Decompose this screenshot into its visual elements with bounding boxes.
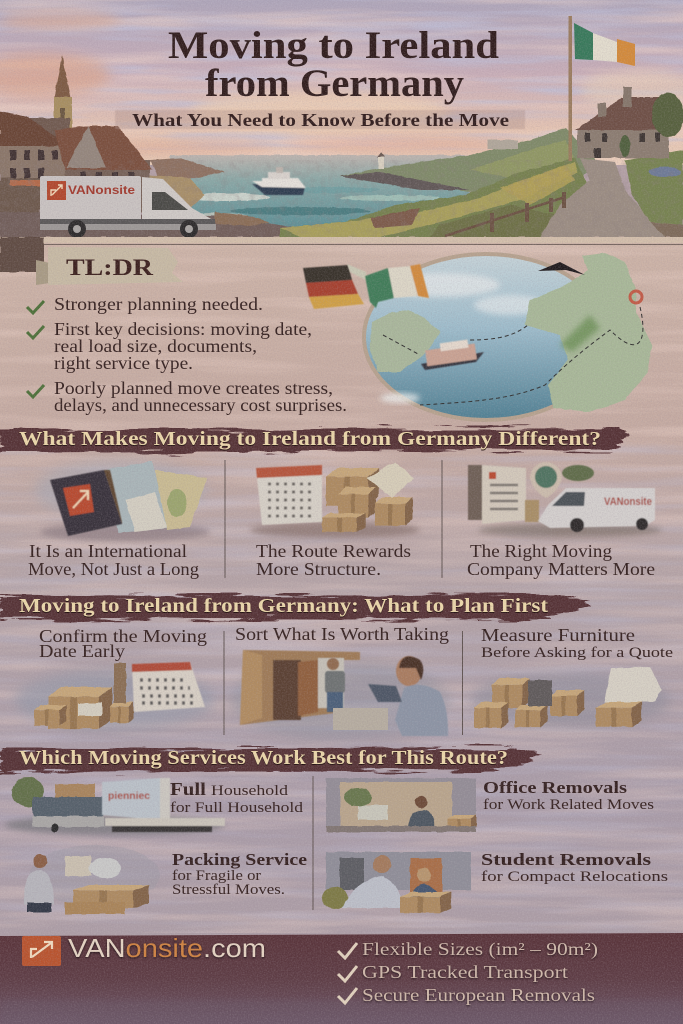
panel: three differences <box>28 460 662 579</box>
icon: packer with boxes <box>24 845 160 914</box>
icon: maps <box>105 461 207 533</box>
service: full household: for Full Household <box>170 800 304 816</box>
footer benefits <box>338 939 598 1005</box>
service: packing: Stressful Moves. <box>172 882 285 898</box>
service: office removals: for Work Related Moves <box>483 797 654 813</box>
service: packing <box>24 845 308 914</box>
icon: passport <box>50 470 122 536</box>
wooden fence <box>445 192 565 236</box>
icon: car with luggage <box>32 784 104 832</box>
icon: office scene <box>326 778 476 832</box>
TL:DR checklist <box>27 294 347 415</box>
card: measure furniture <box>470 625 673 728</box>
man with tablet <box>368 656 448 736</box>
card: moving company: The Right Moving <box>470 541 612 561</box>
plane <box>538 262 585 275</box>
card: confirm the moving date <box>15 626 215 730</box>
icon: delivery van <box>525 488 655 532</box>
service: student removals <box>322 850 668 913</box>
title: Moving to Ireland <box>168 24 499 67</box>
icon: delivery van: VANonsite <box>604 496 652 508</box>
service: packing: Packing Service <box>172 850 308 869</box>
footer panel <box>0 933 683 1024</box>
icon: stacked furniture boxes <box>474 667 662 728</box>
card: international move: Move, Not Just a Long <box>28 559 199 579</box>
card: moving company <box>467 462 662 579</box>
card: confirm the moving date: Confirm the Moving <box>39 626 207 646</box>
icon: moving boxes <box>34 663 134 729</box>
card: sort what is worth taking <box>230 624 450 740</box>
ground road and rocks <box>0 212 320 237</box>
sea with waves <box>170 155 470 227</box>
path and hedges <box>540 150 683 237</box>
service: office removals: Office Removals <box>483 778 627 797</box>
service: full household <box>5 777 304 835</box>
section banner: which services: Which Moving Services Work Best for This Route? <box>19 747 508 769</box>
check item 2: real load size, documents, <box>54 336 257 356</box>
benefit: secure removals: Secure European Removals <box>362 985 595 1005</box>
right headland and lighthouse <box>339 128 600 192</box>
card: route structure: The Route Rewards <box>256 541 411 561</box>
stone house <box>575 87 683 158</box>
left coastal town with church <box>0 55 225 222</box>
TL:DR ribbon <box>0 237 183 285</box>
card: route structure <box>250 462 420 579</box>
service: student removals: Student Removals <box>481 850 651 869</box>
icon: calendar <box>256 465 322 525</box>
icon: plant <box>12 777 44 807</box>
icon: wall calendar <box>132 662 205 712</box>
page background paper <box>0 230 683 1024</box>
TL:DR ribbon: TL:DR <box>66 255 153 280</box>
sky <box>0 0 683 165</box>
German flag <box>303 265 364 309</box>
icon: removal lorry: pienniec <box>108 791 150 802</box>
icon: student scene <box>322 852 471 913</box>
check item 3: delays, and unnecessary cost surprises. <box>54 395 347 415</box>
route map circle <box>303 253 652 420</box>
moving van: VANonsite <box>68 183 135 197</box>
subtitle band: What You Need to Know Before the Move <box>132 110 509 130</box>
panel: services <box>5 776 668 914</box>
card: route structure: More Structure. <box>256 559 381 579</box>
card: sort what is worth taking: Sort What Is Worth Taking <box>235 624 449 644</box>
card: international move <box>28 460 210 579</box>
benefit: flexible sizes: Flexible Sizes (im² – 90m²) <box>362 939 598 960</box>
card: international move: It Is an International <box>29 541 187 561</box>
logo mark <box>22 936 61 966</box>
panel edge <box>0 237 683 243</box>
section banner: what makes it different <box>0 428 630 453</box>
lifebuoy marker <box>630 291 642 303</box>
card: measure furniture: Before Asking for a Quote <box>481 645 673 661</box>
icon: wardrobe <box>240 650 360 725</box>
check item 3: Poorly planned move creates stress, <box>54 378 333 398</box>
service: full household: Full <box>170 779 206 799</box>
section banner: what to plan first: Moving to Ireland from Germany: What to Plan First <box>19 595 548 617</box>
check item 2: right service type. <box>54 353 193 373</box>
card: moving company: Company Matters More <box>467 559 655 579</box>
flag pole with Irish flag <box>568 16 635 161</box>
service: student removals: for Compact Relocations <box>481 869 668 885</box>
benefit: GPS tracked: GPS Tracked Transport <box>362 962 568 982</box>
panel: plan first <box>15 624 673 740</box>
check item 2: First key decisions: moving date, <box>54 319 312 339</box>
check item 2 <box>27 319 312 373</box>
map ferry <box>421 340 484 370</box>
card: measure furniture: Measure Furniture <box>481 625 635 645</box>
ferry ship <box>252 167 306 195</box>
title: from Germany <box>205 62 465 105</box>
Irish flag <box>347 264 429 308</box>
section banner: what to plan first <box>0 595 590 620</box>
icon: parcels <box>322 462 414 532</box>
icon: location badge <box>530 462 594 498</box>
check item 3 <box>27 378 347 415</box>
service: packing: for Fragile or <box>172 868 261 884</box>
card: confirm the moving date: Date Early <box>39 641 125 661</box>
person at wardrobe <box>325 658 345 712</box>
panel: TL:DR <box>0 237 652 420</box>
logo wordmark: VANonsite .com <box>68 933 266 963</box>
icon: checklist board <box>468 465 526 524</box>
moving van <box>40 176 216 238</box>
section banner: what makes it different: What Makes Moving to Ireland from Germany Different? <box>19 428 601 450</box>
icon: removal lorry <box>102 778 225 832</box>
service: office removals <box>326 778 654 832</box>
service: full household: Household <box>211 783 289 799</box>
check item 1: Stronger planning needed. <box>54 294 263 314</box>
foreground meadow <box>280 158 590 237</box>
hero scene <box>0 0 683 238</box>
title <box>168 24 499 105</box>
